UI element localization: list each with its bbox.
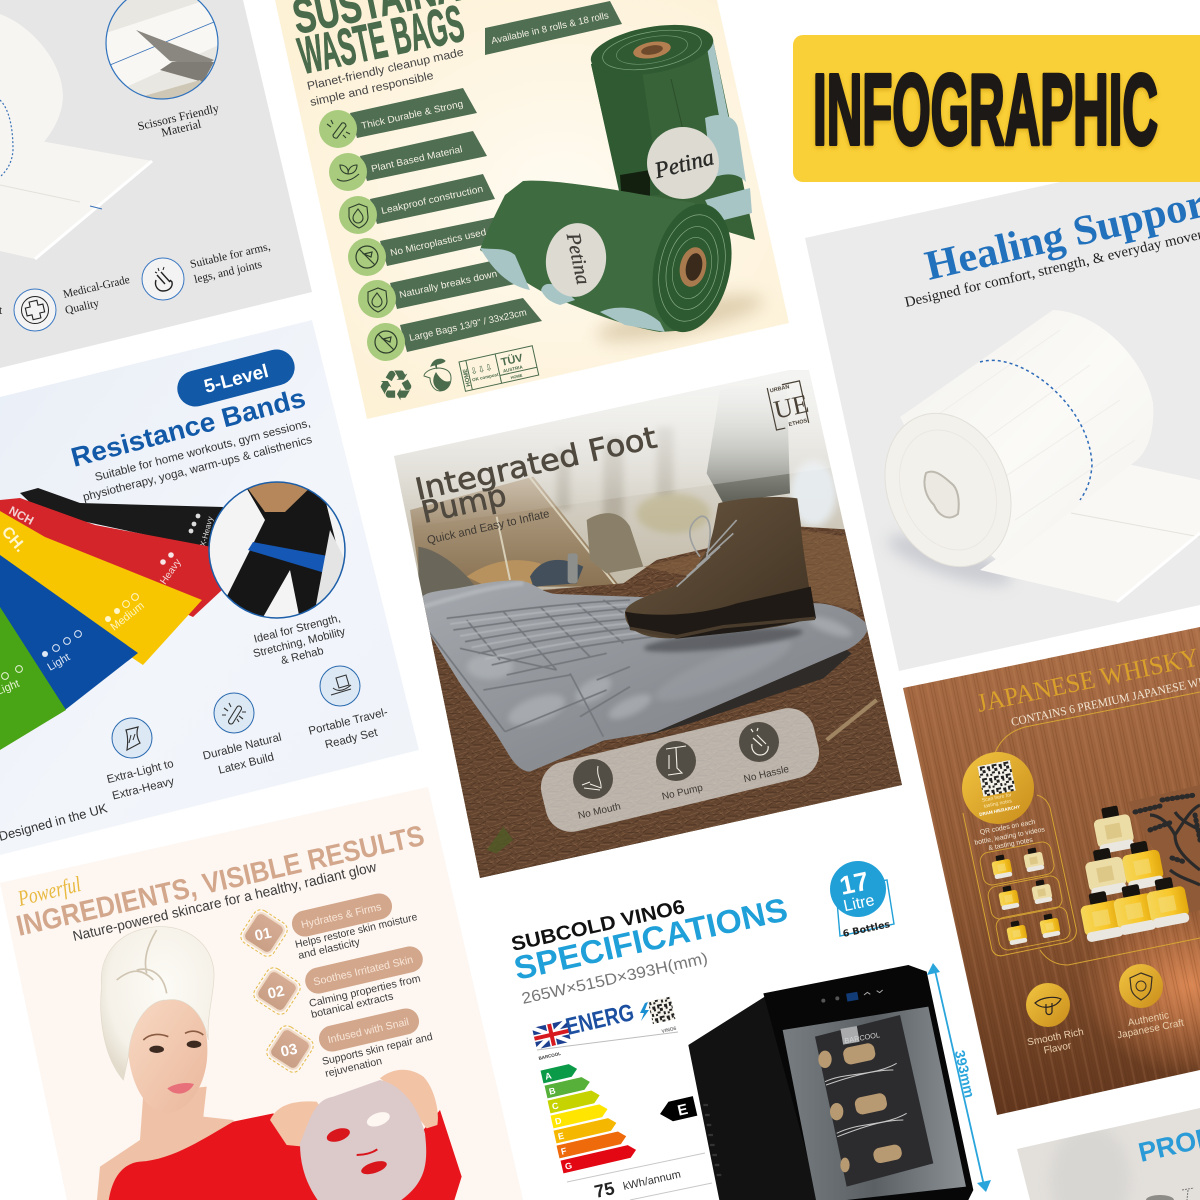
chart: energy rating bars: A xyxy=(544,1070,553,1082)
towel xyxy=(101,927,214,1080)
product: wine cooler xyxy=(688,965,973,1200)
hiking boot xyxy=(625,497,813,638)
neck and shoulders xyxy=(97,1087,240,1200)
step 03 xyxy=(264,1006,434,1080)
text: 75 kwh/annum: kWh/annum xyxy=(622,1169,682,1193)
product: lying bag roll xyxy=(480,181,743,339)
panel: integrated foot pump xyxy=(390,370,910,880)
icon: smooth rich flavor xyxy=(1026,983,1070,1027)
panel: japanese whisky xyxy=(900,620,1200,1120)
facial features xyxy=(149,1046,164,1053)
rating pointer E xyxy=(658,1096,697,1124)
band: light blue xyxy=(0,555,138,710)
icon: authentic craft xyxy=(1119,964,1163,1008)
text: durable natural latex: Durable Natural xyxy=(202,732,283,763)
product: upright bag roll xyxy=(587,17,755,240)
door logo xyxy=(840,1026,860,1045)
logo: urban ethos: URBAN xyxy=(769,384,790,394)
text: suitable for arms: legs, and joints xyxy=(193,259,264,286)
icon: portable set xyxy=(320,666,360,706)
product: lying bag roll: Petina xyxy=(561,230,594,287)
text: durable natural latex xyxy=(202,732,283,777)
mat highlights xyxy=(467,612,854,732)
chart: energy rating bars xyxy=(541,1063,638,1173)
icon: durable latex xyxy=(214,693,254,733)
text: qr codes note xyxy=(974,819,1046,852)
text: 75 kwh/annum xyxy=(567,1153,712,1200)
forest floor xyxy=(420,527,910,880)
text: designed in the UK: Designed in the UK xyxy=(0,800,109,844)
text: qr codes note: & tasting notes xyxy=(988,837,1034,852)
badge: 17 litre 6 bottles: Litre xyxy=(842,892,876,915)
artwork: bonsai tree board xyxy=(1128,785,1200,913)
text: authentic japanese craft: Japanese Craft xyxy=(1116,1018,1185,1041)
panel background xyxy=(0,310,430,870)
text: medical-grade xyxy=(62,276,130,314)
icon: UK flag xyxy=(532,1020,571,1049)
forest backdrop xyxy=(390,370,910,880)
medallion: qr code: tasting notes xyxy=(983,798,1013,810)
side vents xyxy=(703,1105,721,1175)
text: tagline xyxy=(306,47,465,109)
panel background xyxy=(900,620,1200,1120)
step 03: rejuvenation xyxy=(324,1055,383,1080)
text: portable travel-ready: Ready Set xyxy=(324,727,380,751)
panel: waste bags xyxy=(270,0,800,430)
energy label header xyxy=(532,997,678,1061)
logo: urban ethos: ETHOS xyxy=(788,418,808,428)
wood grain xyxy=(900,620,1200,1120)
certification: OK compost home TUV: HOME xyxy=(510,373,523,380)
text: qr codes note: QR codes on each xyxy=(979,819,1036,836)
band: x-heavy black xyxy=(20,488,223,549)
heading: integrated foot pump: Integrated Foot xyxy=(412,420,660,508)
sweater xyxy=(108,1110,462,1200)
feature: thick durable xyxy=(319,88,477,148)
icon: compostable sprout xyxy=(424,359,451,391)
feature: no microplastics xyxy=(348,217,506,276)
feature: naturally breaks down xyxy=(358,258,515,318)
shadow beneath boot xyxy=(643,623,804,657)
text: smooth rich flavor: Smooth Rich xyxy=(1026,1027,1085,1048)
mat underside shadow xyxy=(637,650,852,738)
badge: 5-Level xyxy=(177,350,295,406)
callout labels xyxy=(577,764,791,822)
product: wine cooler: BARCOOL xyxy=(844,1030,881,1045)
text: ideal for strength: Stretching, Mobility xyxy=(252,626,347,660)
feature: no microplastics: No Microplastics used xyxy=(389,227,487,259)
certification: OK compost home TUV: ⇩⇩⇩ xyxy=(469,362,494,377)
photo inset: band in use xyxy=(208,481,346,619)
panel: ingredients xyxy=(0,780,530,1200)
icon: no pump xyxy=(656,741,696,781)
icon: finger snap xyxy=(142,258,184,300)
certification: OK compost home TUV: TÜV xyxy=(500,351,525,369)
chart: energy rating bars: F xyxy=(560,1146,568,1157)
certification: OK compost home TUV: HOME xyxy=(463,368,472,387)
badge: 5-Level: 5-Level xyxy=(202,361,271,398)
panel background xyxy=(0,780,530,1200)
step 01 xyxy=(238,891,419,962)
text: smooth rich flavor: Flavor xyxy=(1043,1040,1073,1057)
feature: plant based: Plant Based Material xyxy=(370,144,463,175)
pillow end highlight xyxy=(423,583,523,607)
energy label header: VINO6 xyxy=(661,1026,677,1035)
step 01: and elasticity xyxy=(297,936,362,962)
misty trees xyxy=(557,427,710,533)
wire racks xyxy=(825,1063,907,1137)
face xyxy=(128,998,207,1113)
icon: extra-light bands xyxy=(112,718,152,758)
arrow: height dimension: 393mm xyxy=(952,1049,978,1099)
logo: urban ethos xyxy=(767,380,813,431)
soft shadow under rolls xyxy=(594,285,766,351)
top haze xyxy=(390,370,910,530)
medallion: qr code: DRAM HIERARCHY xyxy=(979,804,1021,817)
chart: energy rating bars: E xyxy=(557,1131,565,1142)
roll ground shadow xyxy=(883,525,1017,595)
callout: no mouth, no pump, no hassle xyxy=(536,703,824,837)
energy label header: BARCOOL xyxy=(538,1051,562,1061)
badge: 17 litre 6 bottles: 17 xyxy=(837,866,871,901)
text: resistance intro: Suitable for home workouts, gym sessions, xyxy=(94,417,312,484)
bandage roll xyxy=(0,14,152,259)
band: heavy red: NCH xyxy=(7,503,36,528)
feature: plant based xyxy=(329,131,487,191)
panel: bandage features xyxy=(0,0,320,370)
text: authentic japanese craft: Authentic xyxy=(1127,1010,1170,1029)
icon: no mouth xyxy=(573,759,613,799)
sleeping mat xyxy=(421,581,868,772)
bottle pyramid xyxy=(1078,803,1191,943)
band: medium yellow xyxy=(0,511,202,665)
heading: integrated foot pump: Pump xyxy=(418,478,510,531)
text: tagline: Planet-friendly cleanup made xyxy=(306,47,465,93)
panel background xyxy=(270,0,800,430)
text: tagline: simple and responsible xyxy=(309,70,435,109)
glass door xyxy=(783,1007,966,1200)
logo: urban ethos: UE xyxy=(771,389,811,425)
step 02: botanical extracts xyxy=(310,990,395,1021)
step 02: Soothes Irritated Skin xyxy=(312,954,415,988)
text: ideal for strength: Ideal for Strength, xyxy=(253,613,342,646)
step 02 xyxy=(251,944,425,1021)
text: extra-light to extra-heavy: Extra-Light to xyxy=(106,758,175,786)
step 01: Helps restore skin moisture xyxy=(294,911,419,951)
text: scissors friendly: Material xyxy=(160,117,203,139)
medallion: qr code xyxy=(962,752,1034,824)
feature: thick durable: Thick Durable & Strong xyxy=(360,99,464,132)
heading: resistance bands: Resistance Bands xyxy=(68,383,309,473)
text: quick and easy: Quick and Easy to Inflate xyxy=(426,508,551,547)
feature: naturally breaks down: Naturally breaks down xyxy=(398,269,498,301)
campfire smoke xyxy=(790,460,837,527)
band: heavy red xyxy=(0,498,222,617)
panel: product partial xyxy=(1010,1100,1200,1200)
panel background xyxy=(1010,1100,1200,1200)
photo scene xyxy=(390,370,910,880)
icon: recycle: ♻ xyxy=(377,361,415,410)
text: extra-light to extra-heavy: Extra-Heavy xyxy=(111,776,176,803)
badge: 17 litre 6 bottles xyxy=(830,861,894,940)
sheet mask xyxy=(300,1080,426,1200)
feature: leakproof: Leakproof construction xyxy=(380,184,484,217)
medallion: qr code: Scan here for xyxy=(981,792,1012,804)
trouser leg xyxy=(707,380,790,503)
certification: OK compost home TUV: OK compost xyxy=(472,372,499,383)
icon: no hassle xyxy=(739,722,779,762)
control panel xyxy=(846,992,859,1002)
text: nature-powered: Nature-powered skincare for a healthy, radiant glow xyxy=(71,858,379,944)
product: bandage roll xyxy=(863,310,1200,602)
text: ideal for strength: & Rehab xyxy=(280,645,325,667)
text: dimensions: 265W×515D×393H(mm) xyxy=(520,950,709,1008)
icon: medical cross xyxy=(14,289,56,331)
product: upright bag roll: Petina xyxy=(651,144,716,183)
text: qr codes note: bottle, leading to videos xyxy=(974,826,1046,847)
step 03: Infused with Snail xyxy=(327,1016,410,1046)
step 01: Hydrates & Firms xyxy=(300,901,383,931)
band: heavy red: Heavy xyxy=(158,557,184,587)
text: scissors friendly: Scissors Friendly xyxy=(136,101,220,133)
bottles xyxy=(818,1042,903,1172)
heading: sustainable waste bags xyxy=(293,0,464,74)
heading: ingredients, visible results: INGREDIENTS, VISIBLE RESULTS xyxy=(14,820,427,943)
energy label header: ENERG xyxy=(563,999,637,1041)
mini bottle rows xyxy=(979,840,1072,952)
step 02: 02 xyxy=(266,983,286,1003)
step 03: 03 xyxy=(279,1041,299,1061)
copper glow xyxy=(1080,895,1200,1075)
panel background xyxy=(0,0,320,370)
callout labels: No Hassle xyxy=(743,764,791,785)
callout labels: No Mouth xyxy=(577,801,622,822)
mat quilting tubes xyxy=(425,600,653,737)
step 01: 01 xyxy=(253,925,273,945)
panel background xyxy=(800,140,1200,680)
heading: specifications: SPECIFICATIONS xyxy=(511,890,791,987)
band: x-heavy black: X-Heavy xyxy=(198,516,215,548)
certification: OK compost home TUV xyxy=(459,346,539,391)
text: medical-grade: Medical-Grade xyxy=(62,274,131,301)
step 03: Supports skin repair and xyxy=(321,1031,434,1068)
feature: large bags: Large Bags 13/9" / 33x23cm xyxy=(408,307,528,344)
backpack xyxy=(587,513,643,573)
band: light blue: Light xyxy=(46,651,72,674)
twig and grass xyxy=(827,700,877,740)
text: ideal for strength xyxy=(254,615,344,664)
chart: energy rating bars: B xyxy=(548,1085,557,1097)
text: portable travel-ready xyxy=(307,706,389,751)
step 02: Calming properties from xyxy=(308,973,422,1010)
illustration: woman with sheet mask xyxy=(97,927,462,1200)
chart: energy rating bars: G xyxy=(564,1160,573,1172)
script: powerful: Powerful xyxy=(14,871,83,911)
ribbon: rolls availability: Available in 8 rolls & 18 rolls xyxy=(490,10,610,47)
band: medium yellow: Medium xyxy=(108,600,147,633)
arrow: height dimension xyxy=(927,963,991,1192)
panel: vino6 specifications xyxy=(509,861,991,1200)
soft light shape xyxy=(1050,1125,1130,1200)
feature: large bags xyxy=(367,298,542,361)
chart: energy rating bars: D xyxy=(554,1115,563,1127)
text: extra-light to extra-heavy xyxy=(106,761,174,800)
hands xyxy=(270,1101,323,1147)
text: medical-grade: Quality xyxy=(64,297,101,317)
tent xyxy=(410,477,620,600)
text: suitable for arms: Suitable for arms, xyxy=(189,241,272,271)
gold connector lines xyxy=(963,692,1200,965)
ribbon: rolls availability xyxy=(485,1,622,55)
chart: energy rating bars: C xyxy=(551,1100,560,1112)
icon: scissors inset xyxy=(105,0,219,100)
callout labels: No Pump xyxy=(661,782,704,803)
certification: OK compost home TUV: AUSTRIA xyxy=(502,364,524,374)
heading: subcold vino6: SUBCOLD VINO6 xyxy=(509,896,687,956)
text: suitable for arms xyxy=(0,241,272,317)
badge: 17 litre 6 bottles: 6 Bottles xyxy=(842,919,891,940)
product detail xyxy=(1146,1188,1194,1200)
panel: resistance bands xyxy=(0,310,430,870)
panel: healing support xyxy=(800,140,1200,680)
band: extra light green xyxy=(0,607,66,750)
feature: leakproof xyxy=(339,174,495,234)
text: durable natural latex: Latex Build xyxy=(217,751,275,777)
rating pointer E: E xyxy=(676,1101,690,1120)
text: resistance intro: physiotherapy, yoga, warm-ups & calisthenics xyxy=(82,434,314,504)
text: portable travel-ready: Portable Travel- xyxy=(307,706,389,738)
qr code xyxy=(648,997,675,1024)
